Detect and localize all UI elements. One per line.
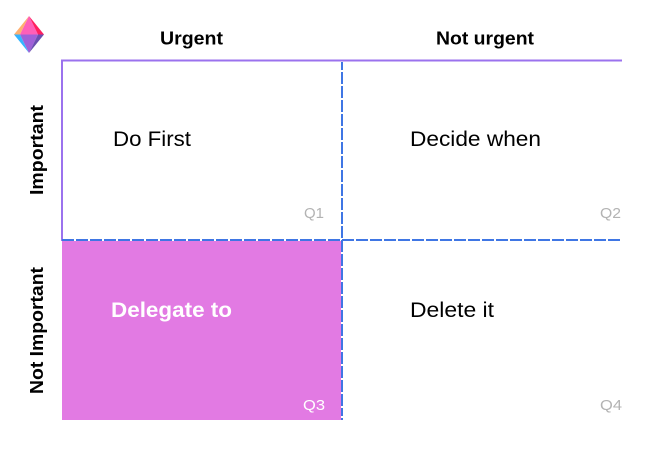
quadrant Q2 text: Decide when: Decide when [410,128,541,151]
quadrant Q3 label: Q3 [303,397,325,414]
quadrant Q1 text: Do First: Do First [113,128,191,151]
quadrant Q2 label: Q2 [600,205,621,222]
matrix frame: purple top and left border [62,60,622,241]
column heading: Urgent: Urgent [160,28,223,48]
quadrant Q4 label: Q4 [600,397,622,414]
icon: gem logo [14,16,44,53]
matrix divider: vertical dashed [341,62,343,420]
row heading: Not Important: Not Important [27,267,47,394]
matrix divider: horizontal dashed [62,239,622,241]
column heading: Not urgent: Not urgent [436,28,534,48]
quadrant Q4 text: Delete it: Delete it [410,299,494,322]
quadrant Q3 fill [62,241,341,420]
quadrant Q1 label: Q1 [304,205,324,222]
row heading: Important: Important [27,105,47,195]
quadrant Q3 text: Delegate to: Delegate to [111,299,232,322]
